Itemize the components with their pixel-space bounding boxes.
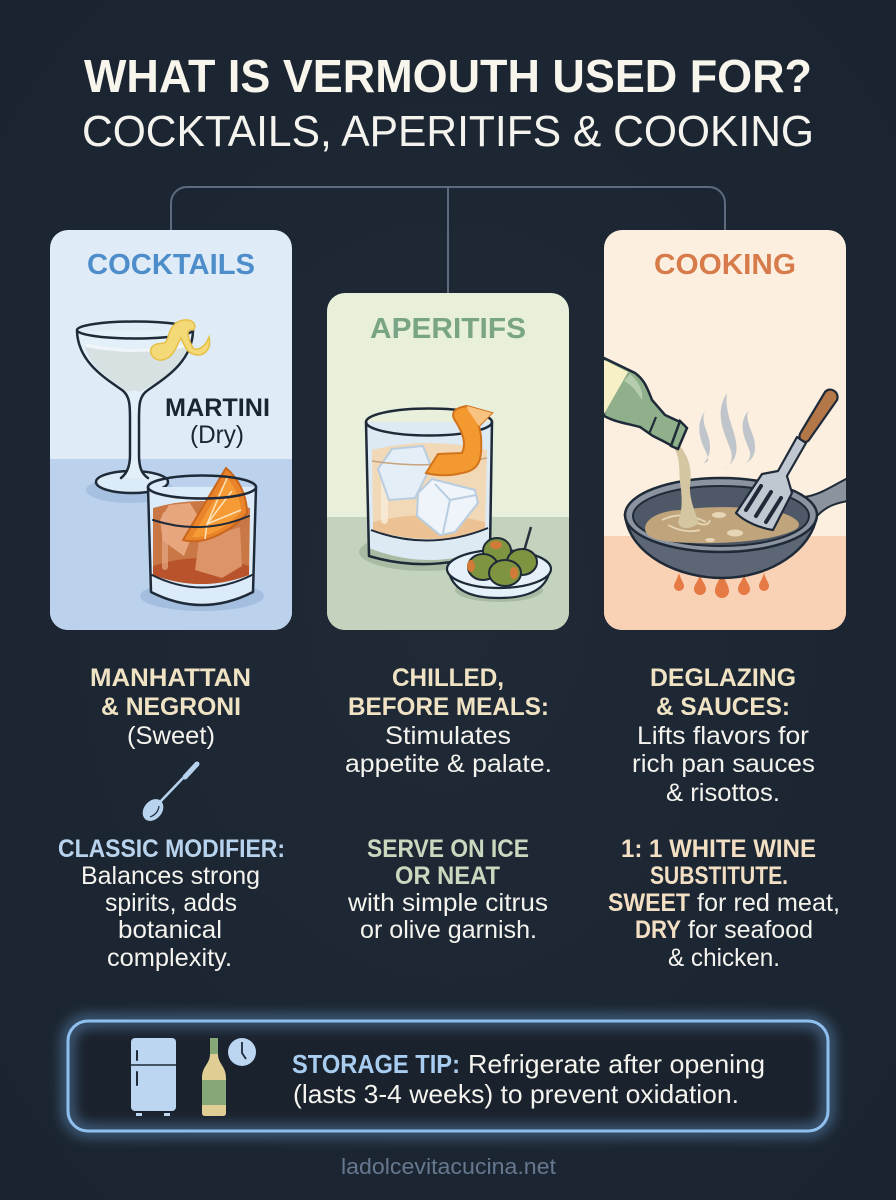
icon: refrigerator	[131, 1038, 176, 1116]
column text: cocktails: Balances strong	[81, 862, 260, 890]
icon: steam	[699, 393, 755, 469]
icon: spatula	[736, 390, 838, 530]
storage tip text: (lasts 3-4 weeks) to prevent oxidation.	[293, 1079, 739, 1109]
column text: aperitifs: CHILLED,	[392, 664, 504, 692]
column text: cooking: Lifts flavors for	[637, 722, 809, 750]
column text: cooking: DEGLAZING	[650, 664, 796, 692]
column text: cooking: & risottos.	[666, 779, 780, 807]
connector lines	[171, 187, 725, 293]
storage tip text: Refrigerate after opening	[468, 1049, 765, 1079]
icon: clock	[228, 1038, 256, 1066]
icon: martini glass	[77, 320, 210, 503]
title	[82, 50, 814, 156]
panel: cooking	[604, 230, 848, 630]
icon: burner flames	[674, 572, 769, 598]
column text: cocktails: & NEGRONI	[101, 693, 241, 721]
column text: cocktails: (Sweet)	[127, 722, 215, 750]
column text: cooking: rich pan sauces	[632, 750, 815, 778]
column text: cooking: SUBSTITUTE.	[650, 862, 788, 890]
column text: cocktails: MANHATTAN	[90, 664, 251, 692]
icon: bar spoon	[138, 764, 197, 825]
column text: aperitifs: or olive garnish.	[360, 916, 537, 944]
icon: glass with ice and orange peel	[359, 406, 492, 571]
heading: aperitifs: APERITIFS	[370, 313, 526, 345]
column text: cooking: DRY	[635, 916, 681, 944]
column text: aperitifs: with simple citrus	[347, 889, 548, 917]
column text: cocktails: spirits, adds	[105, 889, 237, 917]
column text: cooking: SWEET	[608, 889, 690, 917]
heading: cooking: COOKING	[654, 249, 796, 281]
panel: aperitifs	[327, 293, 569, 630]
footer: website: ladolcevitacucina.net	[341, 1154, 556, 1179]
label: martini	[166, 398, 268, 448]
title: WHAT IS VERMOUTH USED FOR?	[84, 50, 812, 102]
heading: cocktails: COCKTAILS	[87, 249, 255, 281]
column text: aperitifs: OR NEAT	[395, 862, 500, 890]
storage tip text: STORAGE TIP:	[292, 1049, 460, 1079]
column text: aperitifs: SERVE ON ICE	[367, 835, 529, 863]
icon: rocks glass with orange	[140, 468, 264, 611]
column text: cooking: & chicken.	[668, 944, 780, 972]
storage tip text	[292, 1049, 765, 1109]
icon: vermouth bottle	[604, 358, 687, 449]
column text: cooking: 1: 1 WHITE WINE	[621, 835, 816, 863]
column text: cocktails: botanical	[118, 916, 222, 944]
column text: cocktails	[58, 664, 285, 972]
panel: cocktails	[50, 230, 292, 630]
column text: aperitifs	[345, 664, 552, 944]
title: COCKTAILS, APERITIFS & COOKING	[82, 107, 814, 156]
icon: olive dish	[447, 527, 551, 602]
label: martini: (Dry)	[190, 421, 244, 449]
column text: cooking	[608, 664, 840, 972]
column text: cocktails: CLASSIC MODIFIER:	[58, 835, 285, 863]
label: martini: MARTINI	[165, 394, 270, 422]
icon: bottle	[202, 1038, 226, 1116]
column text: aperitifs: Stimulates	[385, 722, 511, 750]
column text: aperitifs: BEFORE MEALS:	[348, 693, 549, 721]
column text: cooking: & SAUCES:	[656, 693, 790, 721]
column text: cocktails: complexity.	[107, 944, 232, 972]
column text: aperitifs: appetite & palate.	[345, 750, 552, 778]
icon: pan	[625, 478, 848, 578]
column text: cooking: for red meat,	[697, 889, 840, 917]
icon: pouring liquid	[675, 446, 699, 528]
column text: cooking: for seafood	[688, 916, 813, 944]
callout: storage tip	[68, 1021, 828, 1131]
